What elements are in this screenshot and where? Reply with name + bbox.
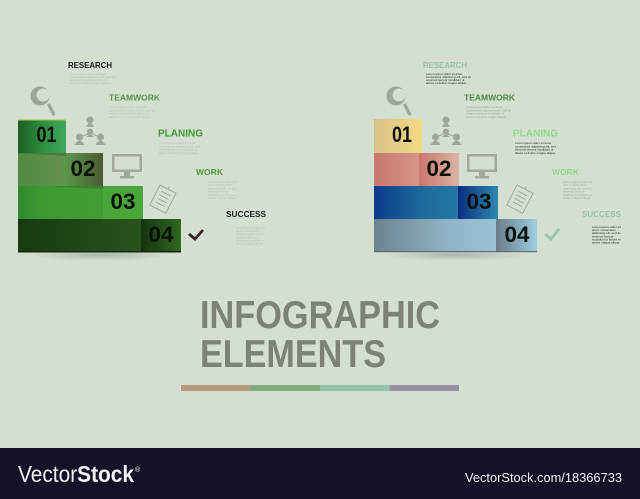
step 02 green: 02	[70, 156, 96, 181]
step 01 green: 01	[36, 122, 56, 147]
label: planing: Lorem ipsum dolor sit amet,	[159, 141, 196, 145]
color bar	[181, 385, 459, 391]
label: work: dolore magna aliqua.	[208, 196, 236, 200]
label: work	[196, 167, 237, 200]
label: work: adipiscing elit, sed do	[563, 186, 592, 190]
label: teamwork: Lorem ipsum dolor sit amet,	[466, 105, 503, 109]
label: success: SUCCESS	[226, 209, 266, 219]
step 02 pink	[374, 153, 459, 186]
label: teamwork: labore et dolore magna aliqua.	[110, 115, 151, 119]
label: research: consectetur adipiscing elit, sed do	[426, 75, 471, 79]
icon: check mark	[189, 230, 203, 239]
icon: clipboard	[150, 182, 177, 213]
label: teamwork: labore et dolore magna aliqua.	[466, 115, 507, 119]
label: planing: eiusmod tempor incididunt ut	[515, 148, 554, 152]
label: success: SUCCESS	[582, 209, 621, 219]
label: work: dolore magna aliqua.	[563, 196, 591, 200]
panel: left green staircase infographic	[18, 60, 266, 261]
footer bar	[0, 448, 640, 499]
icon: check mark	[545, 229, 559, 239]
step 01 green	[18, 120, 66, 153]
label: research: labore et dolore magna aliqua.	[70, 81, 111, 85]
label: work: adipiscing elit, sed do	[208, 186, 237, 190]
label: success: amet, consectetur	[592, 228, 616, 232]
label: planing: Lorem ipsum dolor sit amet,	[515, 141, 552, 145]
label: research	[68, 60, 115, 85]
label: success: incididunt ut labore et	[592, 237, 621, 241]
shadow under right staircase	[384, 249, 528, 261]
step 01 yellow: 01	[392, 122, 412, 147]
label: planing: PLANING	[513, 128, 558, 140]
label: work: WORK	[552, 167, 580, 177]
icon: monitor	[467, 154, 497, 178]
step 02 pink: 02	[426, 156, 452, 181]
label: success: eiusmod tempor	[236, 235, 258, 239]
label: research: labore et dolore magna aliqua.	[426, 81, 467, 85]
label: research: RESEARCH	[68, 60, 112, 70]
label: success: eiusmod tempor	[592, 234, 614, 238]
label: teamwork	[109, 92, 161, 119]
icon: magnifier	[30, 86, 54, 114]
label: teamwork: TEAMWORK	[109, 92, 161, 102]
label: teamwork: consectetur adipiscing elit, sed do	[466, 108, 511, 112]
label: work: amet, consectetur	[563, 183, 587, 187]
title: ELEMENTS	[200, 333, 386, 376]
label: planing: labore et dolore magna aliqua.	[159, 151, 200, 155]
step 03 green: 03	[110, 189, 136, 214]
label: work: incididunt ut labore et	[563, 193, 592, 197]
step 02 green	[18, 153, 103, 186]
label: research: eiusmod tempor incididunt ut	[70, 78, 109, 82]
label: success: Lorem ipsum dolor sit	[592, 225, 621, 229]
label: planing: labore et dolore magna aliqua.	[515, 151, 556, 155]
step 04 green	[18, 219, 181, 252]
label: success: incididunt ut labore et	[236, 238, 265, 242]
label: work: eiusmod tempor	[208, 190, 230, 194]
label: success	[582, 209, 621, 244]
label: success: amet, consectetur	[236, 229, 260, 233]
icon: team	[430, 116, 462, 145]
footer logo: VectorStock	[18, 461, 134, 487]
label: success: Lorem ipsum dolor sit	[236, 226, 265, 230]
label: research	[423, 60, 471, 85]
label: planing: PLANING	[158, 128, 203, 140]
label: planing: consectetur adipiscing elit, sed	[515, 144, 556, 148]
label: research: RESEARCH	[423, 60, 467, 70]
label: research: consectetur adipiscing elit, sed do	[70, 75, 115, 79]
step 01 yellow	[374, 119, 422, 153]
label: research: Lorem ipsum dolor sit amet,	[70, 72, 107, 76]
step 04 green: 04	[148, 222, 174, 247]
label: planing	[513, 128, 558, 155]
step 03 blue: 03	[466, 189, 492, 214]
label: success: adipiscing elit, sed do	[236, 232, 265, 236]
title: INFOGRAPHIC	[200, 294, 440, 337]
label: success: dolore magna aliqua.	[592, 240, 620, 244]
footer id: VectorStock.com/18366733	[465, 470, 622, 485]
label: research: Lorem ipsum dolor sit amet,	[426, 72, 463, 76]
label: teamwork: TEAMWORK	[464, 92, 516, 102]
label: work: Lorem ipsum dolor sit	[208, 180, 237, 184]
label: planing: consectetur adipiscing elit, sed	[159, 144, 200, 148]
icon: magnifier	[386, 86, 410, 114]
icon: clipboard	[507, 182, 534, 213]
label: work: amet, consectetur	[208, 183, 232, 187]
label: teamwork: consectetur adipiscing elit, sed do	[110, 108, 155, 112]
label: success: dolore magna aliqua.	[236, 242, 264, 246]
icon: team	[74, 116, 106, 145]
step 03 green	[18, 186, 143, 219]
registered mark: ®	[135, 466, 141, 474]
label: teamwork: Lorem ipsum dolor sit amet,	[110, 105, 147, 109]
label: teamwork: eiusmod tempor incididunt ut	[466, 112, 505, 116]
shadow under left staircase	[28, 249, 172, 261]
title	[200, 294, 440, 376]
step 03 blue	[374, 186, 498, 219]
label: planing	[158, 128, 203, 155]
icon: monitor	[112, 154, 142, 178]
label: planing: eiusmod tempor incididunt ut	[159, 148, 198, 152]
label: research: eiusmod tempor incididunt ut	[426, 78, 465, 82]
label: work: incididunt ut labore et	[208, 193, 237, 197]
step 04 light blue	[374, 219, 537, 252]
label: work: eiusmod tempor	[563, 190, 585, 194]
label: work: Lorem ipsum dolor sit	[563, 180, 592, 184]
label: work: WORK	[196, 167, 224, 177]
label: success: adipiscing elit, sed do	[592, 231, 621, 235]
step 04 light blue: 04	[504, 222, 530, 247]
label: success	[226, 209, 266, 246]
label: teamwork: eiusmod tempor incididunt ut	[110, 112, 149, 116]
label: work	[552, 167, 592, 200]
panel: right colored staircase infographic	[374, 60, 621, 261]
label: teamwork	[464, 92, 516, 119]
